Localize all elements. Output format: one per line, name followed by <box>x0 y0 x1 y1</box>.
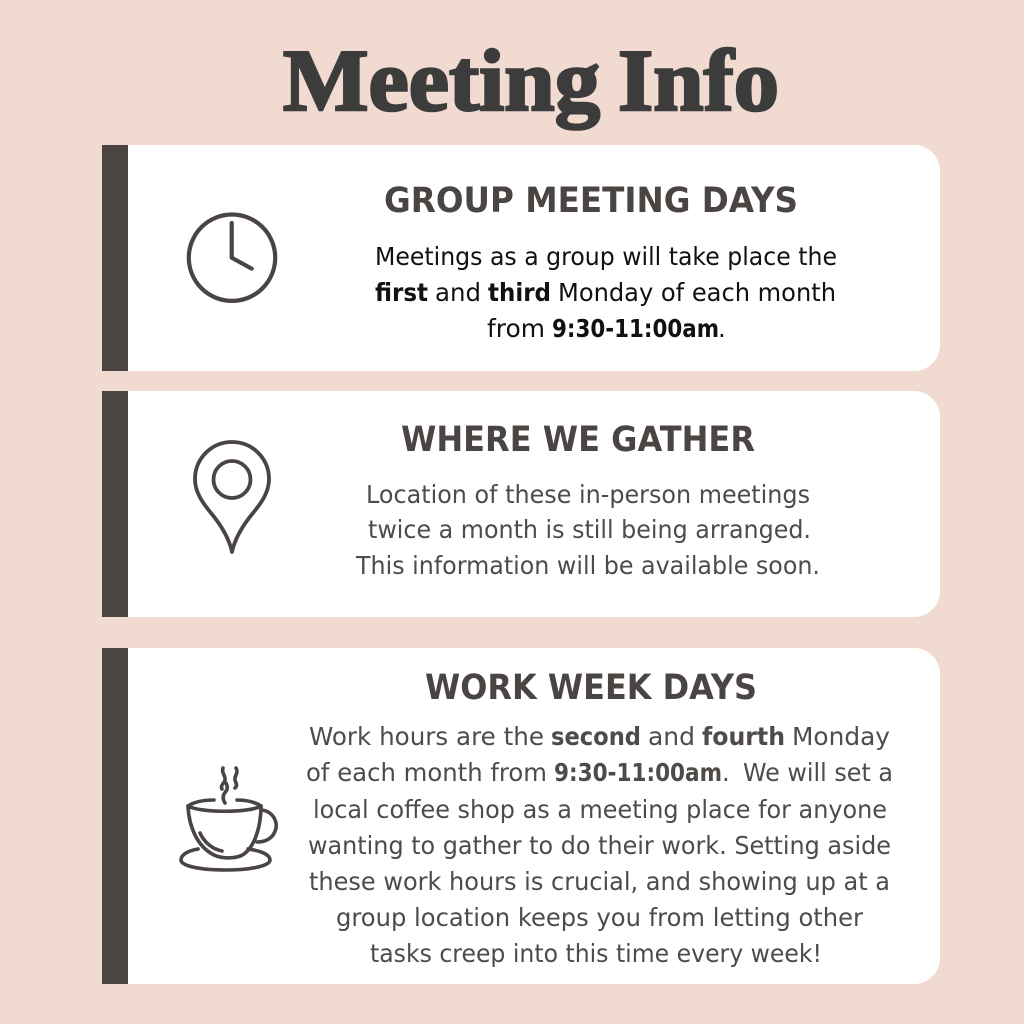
body text <box>375 242 837 343</box>
body text: This information will be available soon. <box>355 551 820 580</box>
title: Meeting <box>283 33 600 130</box>
panel: group meeting days <box>102 145 940 371</box>
body text: 9:30-11:00am <box>554 758 722 787</box>
body text: and <box>435 278 481 307</box>
body text: Monday of each month <box>558 278 836 307</box>
accent bar <box>102 391 128 617</box>
body text: second <box>551 722 641 751</box>
heading: GROUP MEETING DAYS <box>384 181 798 221</box>
body text: Monday <box>792 722 890 751</box>
panel background <box>102 648 940 984</box>
panel background <box>102 145 940 371</box>
body text: group location keeps you from letting other <box>336 903 864 932</box>
body text: fourth <box>702 722 785 751</box>
heading: WORK WEEK DAYS <box>425 668 757 708</box>
accent bar <box>102 648 128 984</box>
body text: . <box>722 758 730 787</box>
body text: from <box>487 314 545 343</box>
panel: work week days <box>102 648 940 984</box>
icon: coffee cup <box>181 768 276 870</box>
body text: Work hours are the <box>309 722 544 751</box>
body text: local coffee shop as a meeting place for anyone <box>313 795 887 824</box>
body text: Meetings as a group will take place the <box>375 242 837 271</box>
body text: first <box>375 278 428 307</box>
body text: twice a month is still being arranged. <box>368 515 811 544</box>
body text <box>306 722 893 968</box>
title <box>283 33 779 130</box>
body text: Location of these in-person meetings <box>366 480 810 509</box>
body text: these work hours is crucial, and showing up at a <box>309 867 890 896</box>
heading: WHERE WE GATHER <box>401 420 755 460</box>
body text: wanting to gather to do their work. Setting aside <box>308 831 891 860</box>
title: Info <box>618 33 779 130</box>
body text <box>355 480 820 580</box>
body text: We will set a <box>743 758 893 787</box>
panel: where we gather <box>102 391 940 617</box>
panel background <box>102 391 940 617</box>
icon: clock <box>189 215 275 301</box>
icon: map pin <box>195 442 269 552</box>
body text: third <box>488 278 551 307</box>
body text: of each month from <box>306 758 547 787</box>
body text: 9:30-11:00am <box>552 314 719 343</box>
body text: tasks creep into this time every week! <box>370 939 822 968</box>
accent bar <box>102 145 128 371</box>
body text: and <box>648 722 695 751</box>
body text: . <box>718 314 726 343</box>
